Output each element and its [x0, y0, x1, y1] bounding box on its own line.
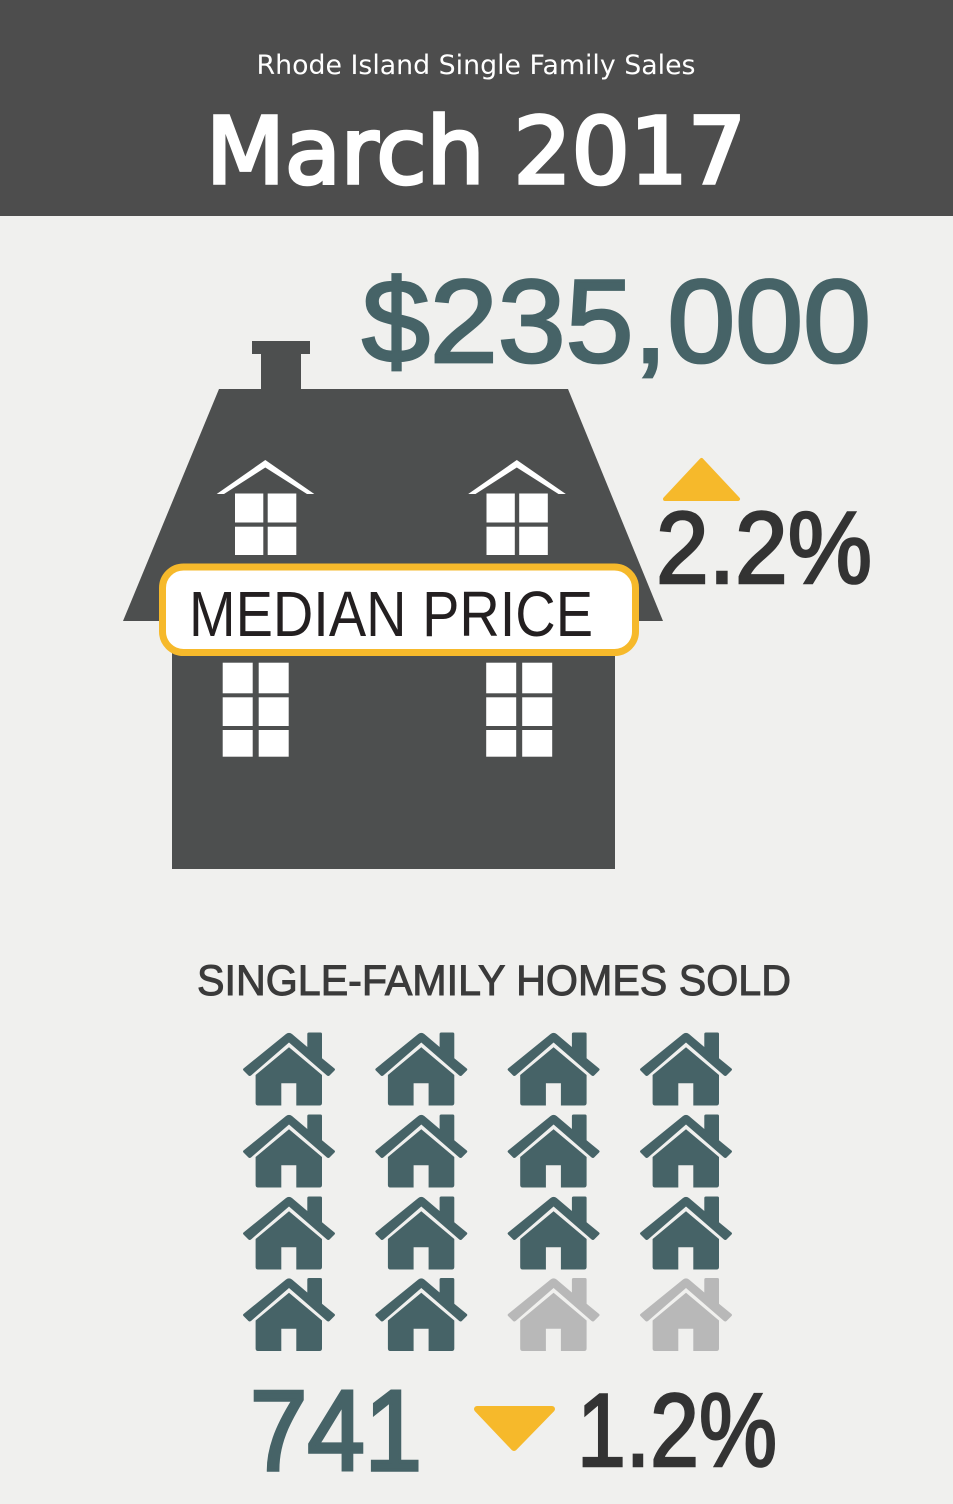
median price value: $235,000	[362, 256, 871, 388]
homes sold heading: SINGLE-FAMILY HOMES SOLD	[197, 957, 791, 1005]
subtitle: Rhode Island Single Family Sales	[256, 50, 696, 81]
house pictogram grid	[243, 1032, 732, 1351]
lower window left	[223, 663, 289, 757]
title: March 2017	[206, 98, 746, 205]
homes sold change: 1.2%	[577, 1373, 777, 1489]
house illustration	[123, 341, 663, 869]
roof	[123, 389, 663, 621]
up arrow	[665, 460, 738, 499]
down arrow	[477, 1409, 552, 1448]
row 4 unfilled	[508, 1278, 732, 1351]
house body	[172, 600, 615, 869]
price change: 2.2%	[656, 491, 872, 605]
row 2	[243, 1114, 732, 1188]
chimney	[252, 341, 310, 392]
dormer left	[217, 460, 314, 555]
header banner	[0, 0, 953, 216]
dormer right	[468, 460, 566, 555]
median price label: MEDIAN PRICE	[189, 578, 593, 650]
row 3	[243, 1196, 732, 1270]
homes sold count: 741	[250, 1368, 422, 1495]
row 4 filled	[243, 1278, 467, 1351]
row 1	[243, 1032, 732, 1106]
lower window right	[486, 663, 552, 757]
